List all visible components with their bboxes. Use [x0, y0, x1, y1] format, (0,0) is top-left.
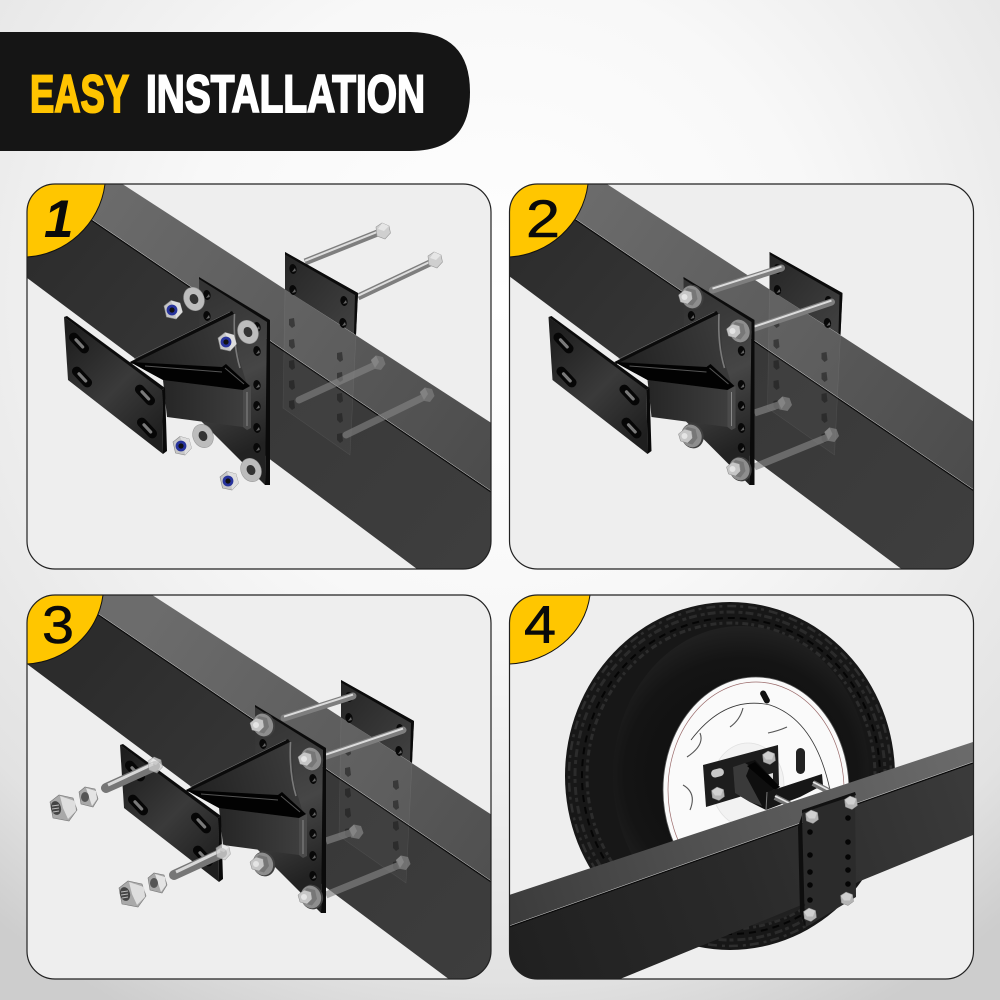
- bolts to plate: [774, 780, 831, 804]
- rear plate: [283, 252, 358, 455]
- title banner: [0, 32, 470, 151]
- rear bolts: [305, 223, 442, 297]
- step 4 badge: [510, 590, 590, 664]
- step 1 badge: [27, 180, 105, 257]
- hub plate and arm: [703, 745, 823, 810]
- title text: INSTALLATION: INSTALLATION: [146, 65, 425, 124]
- panel: step 4: [509, 590, 974, 979]
- washers: [183, 287, 262, 482]
- panel: step 2: [508, 183, 974, 570]
- lock nuts: [164, 300, 238, 490]
- upper bolt through side plate: [106, 757, 162, 788]
- number 4: 4: [524, 596, 556, 655]
- panel: step 3: [26, 594, 492, 980]
- step 3 badge: [27, 590, 103, 664]
- lower bolt through side plate: [174, 844, 230, 875]
- clamp plate on beam: [798, 792, 858, 927]
- number 1: 1: [44, 190, 73, 249]
- bracket: [64, 277, 270, 485]
- ghost bolts behind beam: [299, 356, 434, 435]
- panel: step 1: [26, 183, 492, 570]
- title text: EASY: EASY: [30, 65, 129, 124]
- number 3: 3: [42, 596, 74, 655]
- bracket assembly with fitted bolts: [120, 680, 414, 913]
- step 2 badge: [510, 180, 588, 257]
- spare tire: [565, 602, 895, 950]
- beam: [509, 742, 973, 979]
- number 2: 2: [526, 190, 560, 249]
- square beam: [28, 596, 490, 978]
- white wheel rim: [662, 676, 850, 841]
- loose nuts: [49, 787, 167, 907]
- square beam: [28, 184, 490, 568]
- assembly with bolts fitted: [510, 184, 973, 568]
